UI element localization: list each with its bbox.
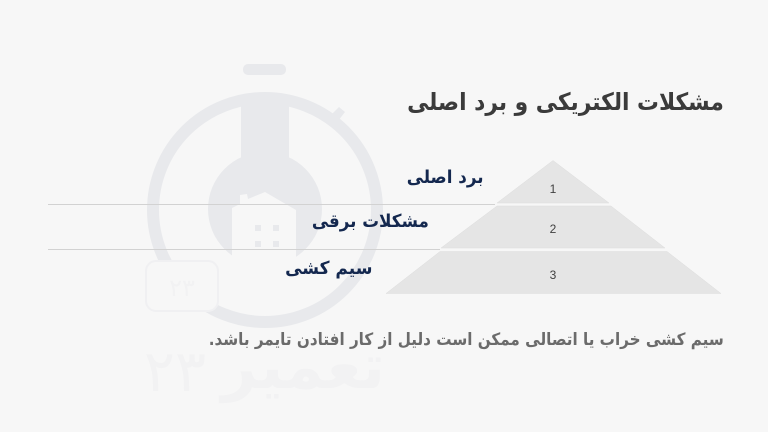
label: electrical problems: مشکلات برقی <box>312 211 429 232</box>
tier 1 <box>497 160 609 203</box>
label: wiring: سیم کشی <box>285 258 372 279</box>
tier 2 <box>441 206 665 248</box>
watermark logo: ۲۳ <box>169 274 195 302</box>
label: main board: برد اصلی <box>407 167 484 188</box>
description text: سیم کشی خراب یا اتصالی ممکن است دلیل از کار افتادن تایمر باشد. <box>209 330 724 350</box>
tier 2: 2 <box>550 222 557 236</box>
title: مشکلات الکتریکی و برد اصلی <box>407 88 724 116</box>
tier 3 <box>386 252 721 294</box>
watermark logo: ۲۳ <box>144 337 206 405</box>
watermark logo: تعمیر <box>218 330 385 403</box>
tier 3: 3 <box>550 268 557 282</box>
tier 1: 1 <box>550 182 557 196</box>
